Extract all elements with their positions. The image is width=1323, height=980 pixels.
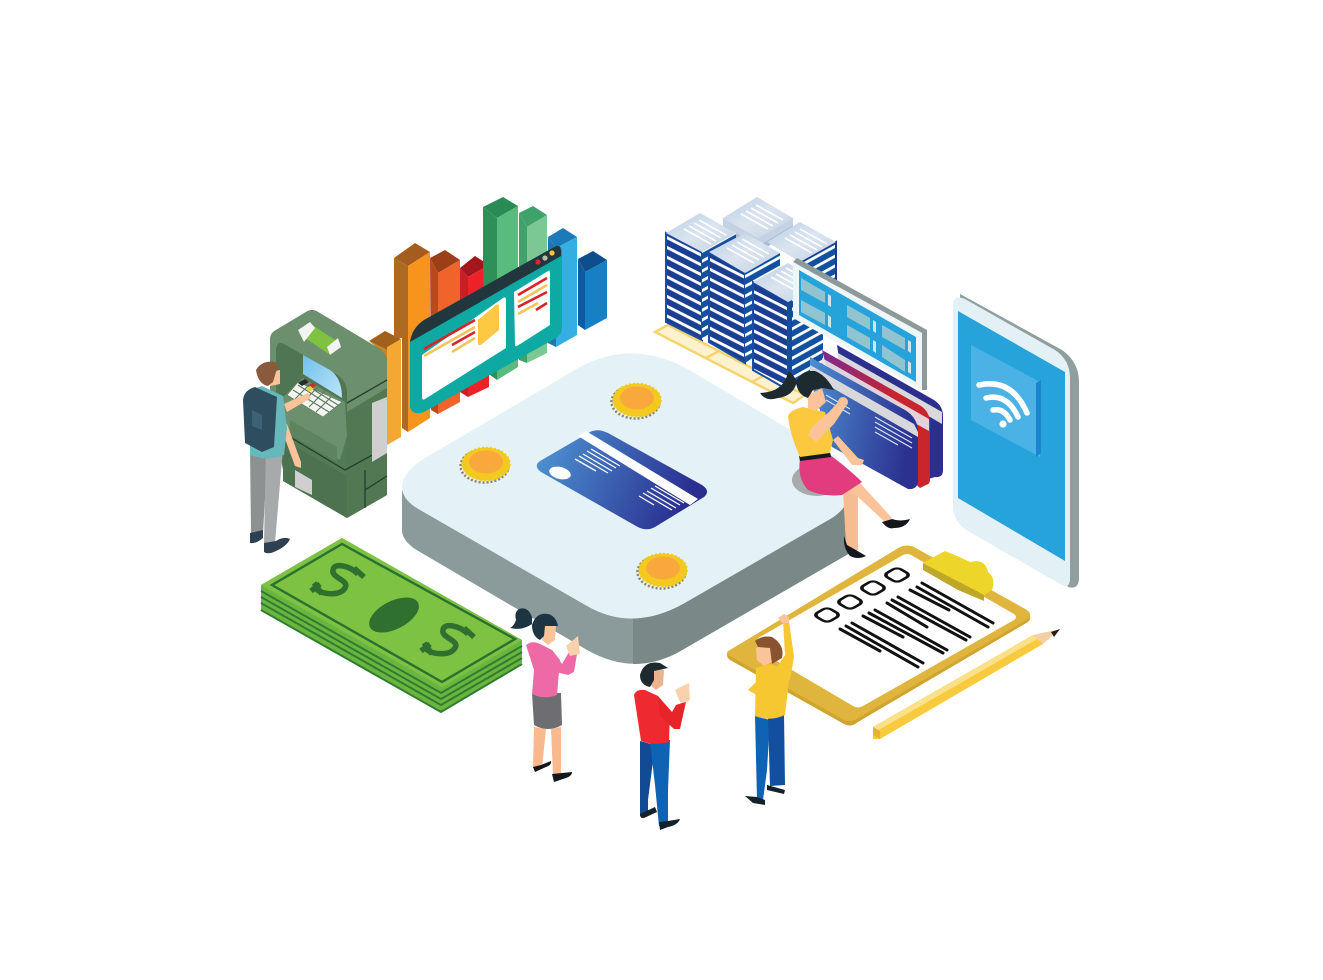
- shoes: [250, 530, 290, 553]
- platform side: [402, 490, 850, 664]
- shirt: [748, 664, 790, 719]
- lower arm: [280, 424, 301, 468]
- title bar: [410, 246, 561, 342]
- coin: [612, 384, 661, 418]
- shirt: [788, 407, 833, 457]
- shirt: [634, 690, 670, 744]
- coin: [638, 554, 687, 588]
- man in red: [634, 662, 690, 830]
- dollar symbol: [421, 626, 474, 654]
- seat shadow: [792, 464, 842, 496]
- phone: [953, 294, 1079, 588]
- paper: [758, 554, 1016, 708]
- clip: [923, 551, 993, 601]
- server rack: front: [753, 263, 823, 390]
- bar: orange: [394, 243, 430, 432]
- ATM screen: [303, 355, 342, 398]
- legs: [250, 448, 283, 543]
- arm: [658, 696, 686, 729]
- checkboxes: [813, 567, 911, 623]
- shoes: [640, 807, 680, 830]
- front card: [810, 357, 918, 489]
- woman sitting on platform: [760, 371, 910, 558]
- bar: dark blue: [578, 251, 607, 330]
- text lines: [840, 583, 993, 667]
- head: [256, 362, 280, 386]
- woman in pink: [510, 608, 580, 782]
- phone screen: [958, 311, 1065, 561]
- ATM top: [270, 310, 387, 412]
- card stack: [810, 345, 943, 489]
- wifi icon: [979, 384, 1027, 426]
- bar: light orange: [369, 331, 401, 445]
- legs: [533, 727, 561, 775]
- pants: [755, 714, 785, 800]
- right pane: [514, 271, 550, 346]
- head: [755, 636, 783, 666]
- hands: [675, 683, 690, 703]
- server rack: middle: [666, 233, 780, 363]
- ATM machine: [270, 310, 387, 518]
- ATM alcove: [276, 343, 347, 430]
- ATM banknote: [298, 322, 341, 355]
- person at ATM: [243, 362, 311, 553]
- shirt: [250, 386, 287, 458]
- ATM lower door: [283, 440, 347, 518]
- clipboard: [727, 546, 1030, 726]
- legs: [843, 481, 892, 552]
- floating dashboard panel: [793, 258, 927, 390]
- head: [510, 608, 558, 645]
- bill oval: [364, 590, 424, 640]
- skirt: [532, 693, 562, 729]
- platform top: [402, 354, 850, 619]
- backpack: [243, 387, 277, 452]
- platform: [402, 354, 850, 664]
- banknote stack: [261, 538, 522, 712]
- credit card: [537, 430, 707, 529]
- shoes: [745, 785, 785, 805]
- pants: [640, 740, 670, 826]
- ATM body: [270, 310, 387, 518]
- shoes: [844, 519, 910, 558]
- window buttons: [535, 250, 555, 265]
- hands: [566, 636, 580, 656]
- ATM slot: [372, 397, 387, 462]
- server rack: back: [723, 197, 793, 252]
- navy card: [837, 345, 943, 480]
- red card: [822, 350, 930, 488]
- arm: [552, 650, 577, 675]
- top: [526, 642, 560, 697]
- arms: [808, 397, 864, 465]
- server rack: right: [767, 222, 836, 315]
- bar: dark orange: [430, 250, 460, 414]
- bar: red: [460, 256, 489, 397]
- ATM keypad: [287, 379, 342, 417]
- ATM receipt box: [295, 470, 312, 495]
- ATM shelf: [282, 378, 347, 460]
- belt: [799, 452, 831, 461]
- head: [760, 371, 834, 411]
- man in yellow: [745, 614, 794, 805]
- hand on keypad: [284, 393, 311, 412]
- wifi tile: [971, 345, 1041, 457]
- dollar symbol: [311, 566, 364, 594]
- bar: green: [483, 197, 518, 380]
- ATM right side: [347, 387, 387, 518]
- pencil: [873, 629, 1060, 739]
- browser window panel: [410, 246, 562, 413]
- shoes: [533, 761, 572, 782]
- skirt: [799, 455, 862, 495]
- coin: [460, 448, 510, 482]
- server rack: left: [666, 213, 736, 340]
- bar chart: [369, 197, 607, 445]
- raised arm: [775, 621, 794, 680]
- bar: blue: [548, 228, 577, 347]
- head: [640, 662, 668, 690]
- left pane: [422, 297, 506, 400]
- bar: light green: [519, 206, 547, 363]
- server base: [655, 325, 805, 403]
